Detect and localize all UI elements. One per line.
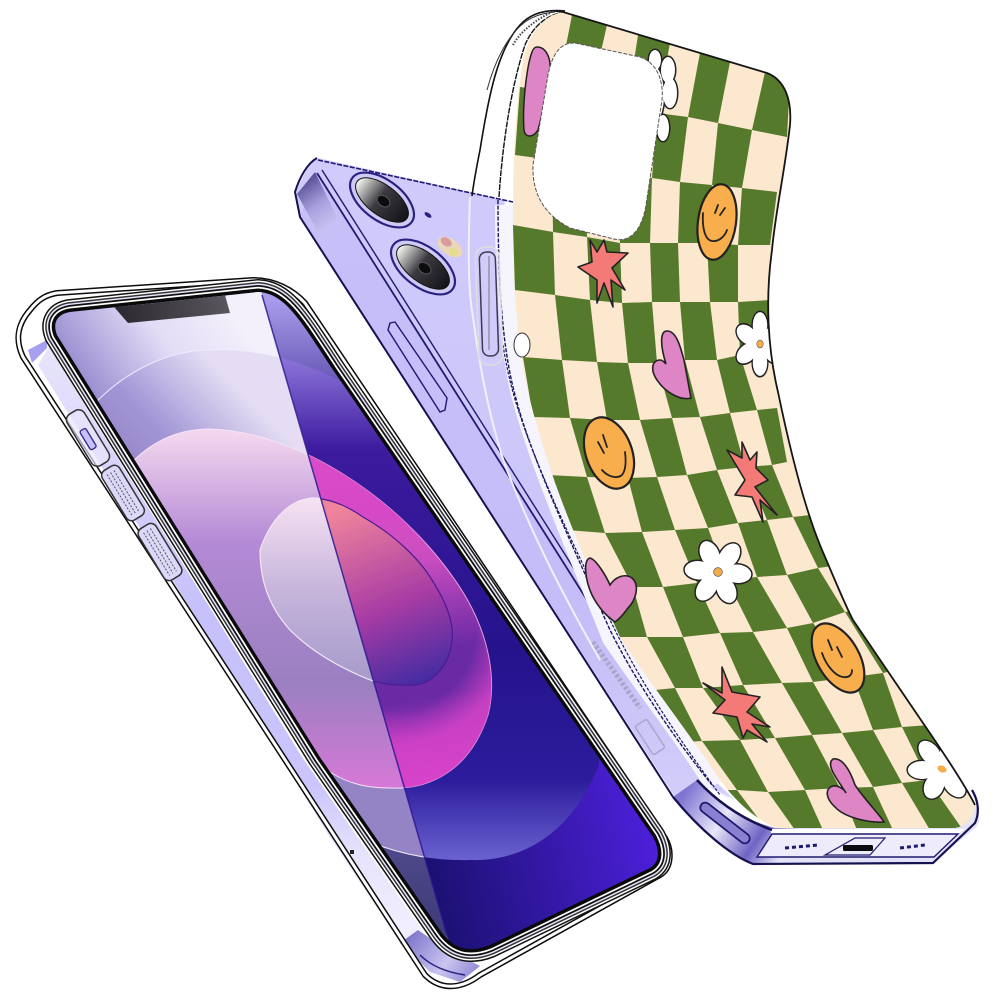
bezel stripes [55, 292, 658, 949]
camera lens lower [381, 229, 465, 305]
glass pink circle [134, 428, 404, 789]
flower: centre [674, 528, 762, 616]
heart: top left [524, 47, 550, 136]
green checks [513, 15, 987, 830]
flower: top beside camera [648, 48, 678, 142]
wallpaper inner circle [321, 498, 453, 686]
volume down [136, 521, 184, 583]
heart: centre [653, 331, 691, 399]
smiley: lower right [801, 615, 875, 701]
case inner black curve [499, 13, 560, 197]
front phone [18, 280, 680, 986]
body outline [295, 158, 686, 797]
flower: bottom right [906, 739, 967, 800]
port plate [757, 834, 958, 857]
heart: lower left [586, 558, 636, 622]
back phone: purple body [295, 158, 735, 800]
wallpaper pink circle [134, 454, 492, 788]
glass large circle [98, 350, 425, 858]
notch [114, 296, 230, 323]
case lower dashed rim [498, 200, 712, 785]
glass inner circle [259, 497, 374, 682]
case side strip [505, 205, 715, 785]
microphone dot [424, 211, 432, 219]
phone body plate [296, 158, 730, 800]
phone side band [300, 173, 735, 800]
camera cutout [533, 43, 662, 240]
top corner accent [28, 340, 47, 363]
star: lower [703, 667, 770, 742]
charging port [843, 845, 873, 851]
case outer curve [472, 11, 565, 196]
smiley: top right [693, 182, 741, 262]
wallpaper large circle [60, 350, 601, 860]
glass lower region [343, 790, 449, 940]
side button [388, 322, 447, 412]
side band lilac [38, 347, 422, 943]
glass edge line [262, 295, 447, 935]
bottom corner piece [400, 930, 480, 982]
screen base [55, 292, 658, 949]
speaker holes [785, 845, 925, 848]
back case: bottom edge with ports [673, 780, 979, 864]
glass protector reflection [55, 292, 449, 940]
wallpaper upper area [240, 292, 374, 430]
flower: right edge [735, 310, 772, 378]
case light highlight line [469, 197, 600, 660]
volume and mute buttons [64, 407, 184, 583]
small petal on case left edge [514, 333, 530, 357]
case button cutout [475, 247, 503, 365]
speaker slot left [698, 801, 752, 845]
screen [55, 292, 658, 949]
camera lens upper [340, 162, 424, 238]
engraved band text marks [593, 642, 665, 755]
bottom outline [673, 790, 978, 864]
back case: transparent rim lines [469, 11, 720, 795]
bottom rim highlight [770, 829, 965, 836]
case secondary curves [487, 12, 555, 90]
antenna dot [350, 850, 354, 854]
port cutout lines [825, 838, 885, 855]
body corner segment [297, 172, 337, 236]
back case: checker panel [513, 11, 987, 830]
bottom body [673, 780, 979, 864]
flash [434, 232, 466, 262]
glass upper region [55, 292, 280, 510]
star: centre [727, 442, 777, 522]
heart: bottom [827, 759, 884, 822]
cream base [513, 12, 975, 828]
mute switch [64, 407, 112, 469]
case right and top outline [555, 11, 975, 805]
case outer outline [18, 280, 670, 986]
star: top [578, 240, 628, 307]
smiley: centre [575, 410, 643, 496]
volume up [99, 463, 147, 523]
